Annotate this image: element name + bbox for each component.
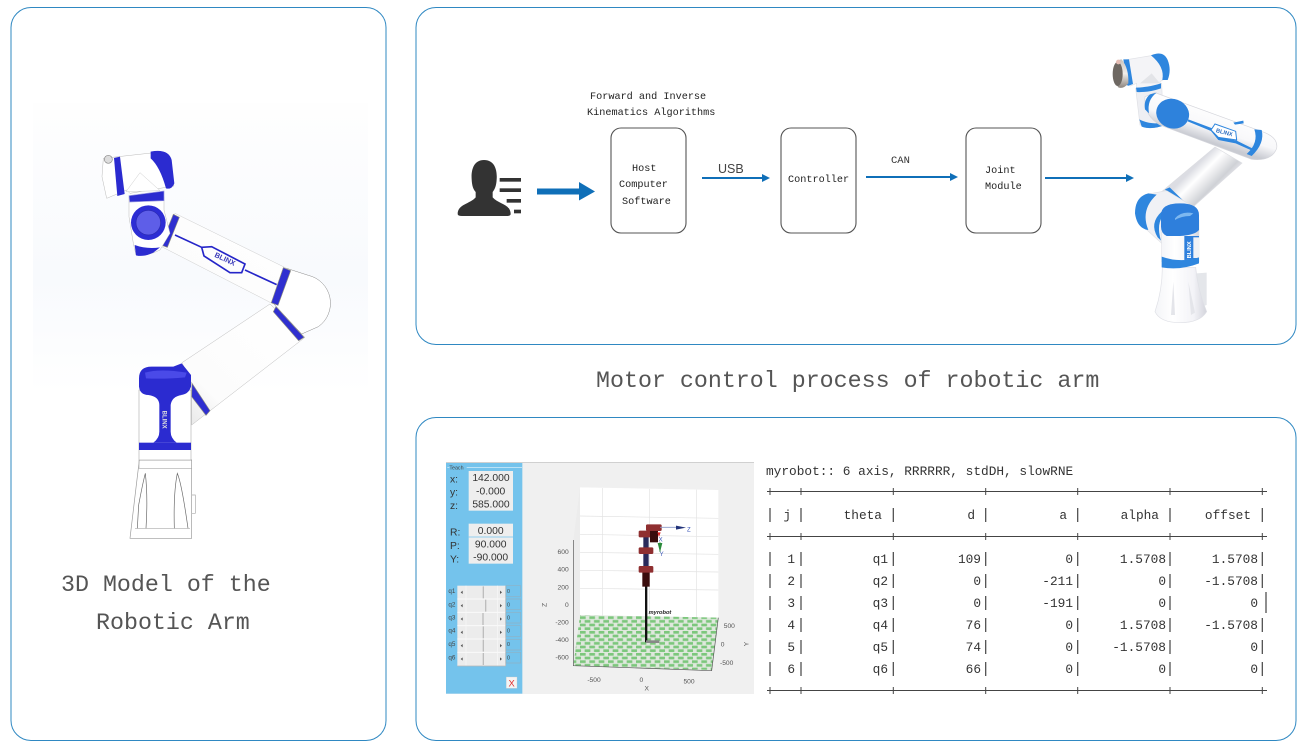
robot stick model: Y — [660, 552, 664, 558]
table rows: q1 — [873, 552, 888, 567]
illustration: 3D robotic arm model: BLINX — [160, 411, 166, 429]
table: DH parameters — [766, 464, 1267, 694]
3D plot: -500 — [587, 677, 601, 684]
box: host computer software: Software — [622, 196, 671, 208]
close button: X — [509, 679, 516, 689]
box: controller — [781, 128, 856, 233]
elbow — [273, 268, 330, 334]
teach control panel: -90.000 — [473, 553, 508, 564]
close button — [506, 677, 517, 689]
box: joint module: Joint — [985, 165, 1016, 177]
lower arm — [1162, 147, 1242, 207]
teach control panel: y: — [450, 488, 458, 499]
joint sliders: 0 — [507, 655, 510, 661]
joint sliders: q5 — [448, 641, 456, 648]
box: controller: Controller — [788, 174, 849, 186]
arm logo stripe: BLINX — [213, 250, 237, 268]
panel: kinematics — [416, 418, 1296, 740]
teach control panel: 142.000 — [472, 473, 510, 484]
teach control panel: x: — [450, 475, 458, 486]
table rows: 74 — [966, 640, 981, 655]
3D plot: X — [644, 686, 649, 693]
table header: theta — [844, 508, 882, 523]
panel: 3D model — [11, 8, 386, 740]
box: host computer software — [611, 128, 686, 233]
box: host computer software: Host — [632, 164, 656, 175]
table header — [783, 508, 1251, 523]
teach control panel: 90.000 — [475, 539, 507, 550]
joint sliders: 0 — [507, 589, 510, 595]
teach control panel: Teach — [449, 466, 464, 472]
logo badge — [1211, 124, 1237, 140]
arrow: to robot — [1045, 174, 1134, 182]
table rows: 0 — [973, 574, 981, 589]
arrow: CAN: CAN — [891, 155, 910, 167]
base — [130, 460, 192, 538]
illustration: 3D robotic arm model — [102, 151, 330, 538]
table rows: 0 — [1065, 662, 1073, 677]
table rows: 66 — [966, 662, 981, 677]
3D plot: 600 — [558, 549, 569, 556]
table rows: 0 — [1250, 662, 1258, 677]
teach control panel: R: — [450, 527, 460, 538]
3D plot: 200 — [558, 584, 569, 591]
robot stick model: X — [659, 537, 663, 543]
3D plot: 500 — [724, 623, 735, 630]
robot stick model: myrobot — [649, 610, 672, 616]
base — [1197, 273, 1207, 308]
3D plot — [542, 487, 750, 693]
lower robot: base, shoulder, tower: BLINX — [1187, 241, 1193, 258]
icon: user with list — [458, 160, 521, 216]
table rows: q4 — [873, 618, 888, 633]
table rows: 109 — [958, 552, 981, 567]
table header: offset — [1205, 508, 1251, 523]
arrow: USB: USB — [718, 162, 744, 176]
joint sliders: q3 — [448, 614, 456, 621]
3D plot: Y — [743, 641, 750, 646]
table rows: -211 — [1042, 574, 1073, 589]
joint sliders — [448, 586, 521, 666]
joint sliders: 0 — [507, 602, 510, 608]
panel: motor control process — [416, 8, 1296, 344]
table rows: 1.5708 — [1212, 552, 1258, 567]
3D plot: 0 — [565, 602, 569, 609]
tower — [139, 390, 191, 460]
joint sliders: q4 — [448, 628, 456, 635]
robot image backdrop — [33, 103, 368, 393]
tower — [1162, 220, 1199, 262]
box: joint module: Module — [985, 181, 1022, 193]
caption: 3D model — [61, 572, 271, 636]
caption: 3D model: Robotic Arm — [96, 610, 250, 636]
joint sliders: q1 — [448, 588, 456, 595]
3D plot: Z — [542, 603, 549, 607]
table rows: 3 — [787, 596, 795, 611]
joint sliders: q2 — [448, 601, 456, 608]
3D plot: 0 — [639, 677, 643, 684]
upper arm — [1145, 93, 1277, 160]
tool head — [1125, 55, 1168, 88]
table rows: q3 — [873, 596, 888, 611]
table rows: 0 — [1065, 640, 1073, 655]
table header: a — [1059, 508, 1067, 523]
table rows — [787, 552, 1258, 677]
shoulder — [1143, 191, 1193, 243]
lower arm — [182, 304, 305, 425]
table title: myrobot:: 6 axis, RRRRRR, stdDH, slowRNE — [766, 464, 1073, 479]
label: algorithms — [587, 91, 715, 119]
table rows: -191 — [1042, 596, 1073, 611]
joint sliders: 0 — [507, 629, 510, 635]
table rows: -1.5708 — [1204, 618, 1258, 633]
lower robot: base, shoulder, tower — [1135, 147, 1242, 323]
joint sliders: q6 — [448, 654, 456, 661]
table rows: 6 — [787, 662, 795, 677]
table rows: 0 — [1158, 574, 1166, 589]
table rows: 0 — [1065, 552, 1073, 567]
teach control panel — [446, 463, 522, 694]
3D plot: 400 — [558, 567, 569, 574]
teach control panel: Y: — [450, 554, 459, 565]
tool head — [102, 152, 174, 198]
teach control panel: -0.000 — [476, 486, 506, 497]
table rows: 0 — [1250, 596, 1258, 611]
3D plot: 500 — [683, 679, 695, 686]
table rules — [767, 488, 1267, 694]
arrow: USB — [702, 162, 770, 182]
blue disc joint — [1152, 94, 1193, 133]
joint sliders: 0 — [507, 642, 510, 648]
robot stick model — [639, 524, 691, 643]
caption: 3D model: 3D Model of the — [61, 572, 271, 598]
box: host computer software: Computer — [619, 180, 668, 191]
table rows: 1.5708 — [1120, 552, 1166, 567]
table header: alpha — [1121, 508, 1159, 523]
table rows: q2 — [873, 574, 888, 589]
table rows: -1.5708 — [1204, 574, 1258, 589]
table header: d — [967, 508, 975, 523]
upper robot: arm and tool — [1113, 53, 1277, 160]
3D plot: -500 — [720, 660, 734, 667]
table rows: 0 — [1065, 618, 1073, 633]
box: joint module — [966, 128, 1041, 233]
table rows: 4 — [787, 618, 795, 633]
table rows: 5 — [787, 640, 795, 655]
3D plot: 0 — [721, 642, 725, 649]
table rows: 0 — [973, 596, 981, 611]
label: algorithms: Forward and Inverse — [590, 91, 706, 103]
table rows: 1 — [787, 552, 795, 567]
illustration: rendered robotic arm — [1113, 53, 1277, 323]
screenshot: teach interface — [446, 462, 754, 694]
caption: motor control process: Motor control process of robotic arm — [596, 368, 1099, 394]
table rows: 0 — [1158, 662, 1166, 677]
teach control panel: P: — [450, 541, 460, 552]
robot stick model: Z — [687, 528, 691, 534]
arrow: user to host — [537, 182, 595, 200]
3D plot: -600 — [555, 655, 569, 662]
joint sliders: 0 — [507, 615, 510, 621]
table rows: 2 — [787, 574, 795, 589]
table header: j — [783, 508, 791, 523]
table rows: 0 — [1158, 596, 1166, 611]
logo badge: BLINX — [1215, 128, 1233, 138]
3D plot: -200 — [555, 620, 569, 627]
3D plot: -400 — [555, 637, 569, 644]
table rows: 1.5708 — [1120, 618, 1166, 633]
table rows: -1.5708 — [1112, 640, 1166, 655]
table rows: 76 — [966, 618, 981, 633]
teach control panel: 0.000 — [478, 526, 504, 537]
teach control panel: 585.000 — [472, 499, 510, 510]
table rows: q6 — [873, 662, 888, 677]
wrist body — [1136, 83, 1163, 125]
label: algorithms: Kinematics Algorithms — [587, 107, 715, 119]
wrist joint — [129, 197, 170, 255]
teach control panel: z: — [450, 501, 458, 512]
arm logo stripe — [175, 235, 277, 285]
upper arm — [162, 213, 287, 304]
table rows: q5 — [873, 640, 888, 655]
arrow: CAN — [866, 155, 958, 181]
table rows: 0 — [1250, 640, 1258, 655]
